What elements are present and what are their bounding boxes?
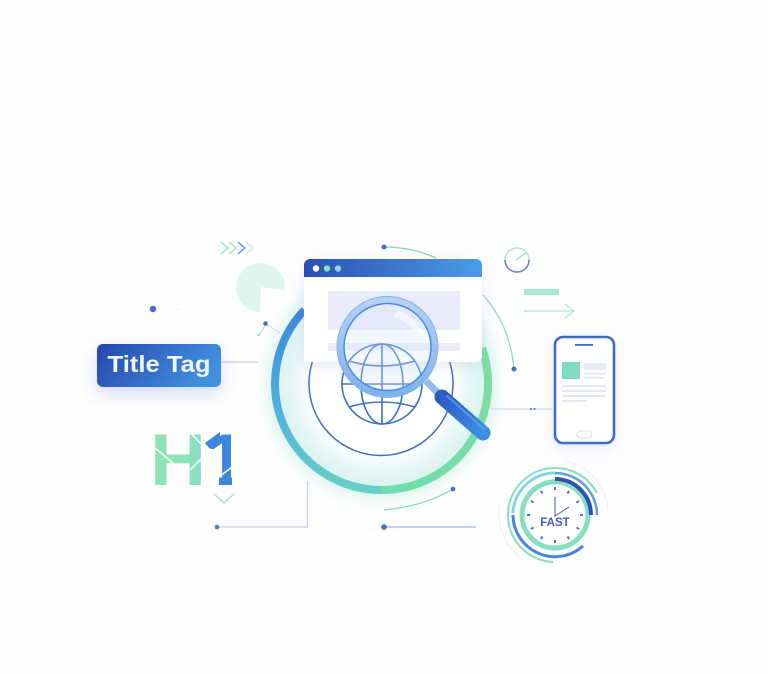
central ring	[254, 256, 508, 510]
icon: chevrons	[221, 242, 253, 254]
infographic canvas	[88, 242, 618, 563]
connector arcs	[215, 244, 552, 530]
icon: chevron down	[214, 494, 234, 503]
window dots	[313, 265, 341, 272]
H1 heading: H	[150, 420, 206, 501]
fast clock gauge	[499, 461, 608, 562]
icon: pie chart	[236, 263, 285, 312]
icon: magnifying glass	[337, 296, 484, 433]
browser window	[304, 259, 482, 362]
clock ticks	[527, 487, 583, 543]
fast clock gauge: FAST	[540, 517, 570, 529]
small link dots	[530, 408, 536, 410]
list lines and arrow	[524, 289, 574, 318]
icon: globe	[342, 344, 422, 424]
H1 heading: 1	[207, 420, 243, 501]
page content blocks	[328, 291, 460, 351]
H1 heading	[155, 432, 232, 485]
dots trail	[150, 306, 179, 312]
icon: check clock	[505, 248, 529, 272]
title tag label	[97, 344, 221, 387]
title tag label: Title Tag	[108, 351, 210, 377]
icon: smartphone	[555, 337, 614, 443]
